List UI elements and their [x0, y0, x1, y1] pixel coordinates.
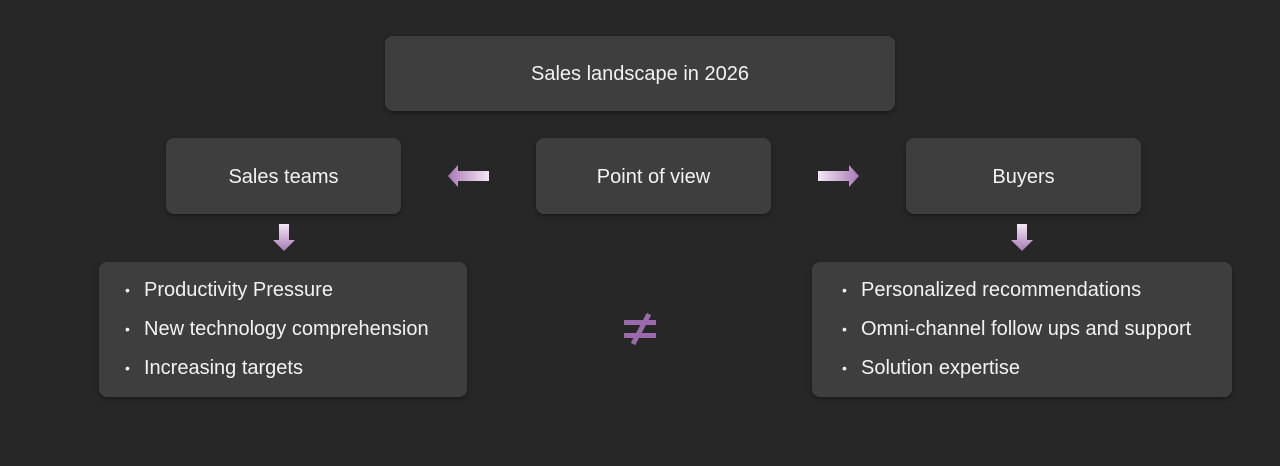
- arrow: right: [818, 165, 859, 187]
- list: sales team challenges: Increasing targets: [144, 357, 303, 379]
- box: sales teams: [166, 138, 401, 214]
- title: [385, 36, 895, 111]
- title: Sales landscape in 2026: [531, 63, 749, 85]
- box: point of view: [536, 138, 771, 214]
- list: sales team challenges: New technology comprehension: [144, 318, 429, 340]
- box: buyers: Buyers: [992, 166, 1055, 188]
- list: sales team challenges: Productivity Pressure: [144, 279, 333, 301]
- box: buyers: [906, 138, 1141, 214]
- box: sales teams: Sales teams: [228, 166, 339, 188]
- arrow: left: [448, 165, 489, 187]
- list: buyer expectations: Omni-channel follow ups and support: [861, 318, 1191, 340]
- icon: not equal: [624, 312, 656, 346]
- box: point of view: Point of view: [597, 166, 710, 188]
- arrow: down left: [273, 224, 295, 251]
- list: buyer expectations: Personalized recommendations: [861, 279, 1141, 301]
- list: buyer expectations: Solution expertise: [861, 357, 1020, 379]
- list: buyer expectations: [812, 262, 1232, 397]
- list: sales team challenges: [99, 262, 467, 397]
- arrow: down right: [1011, 224, 1033, 251]
